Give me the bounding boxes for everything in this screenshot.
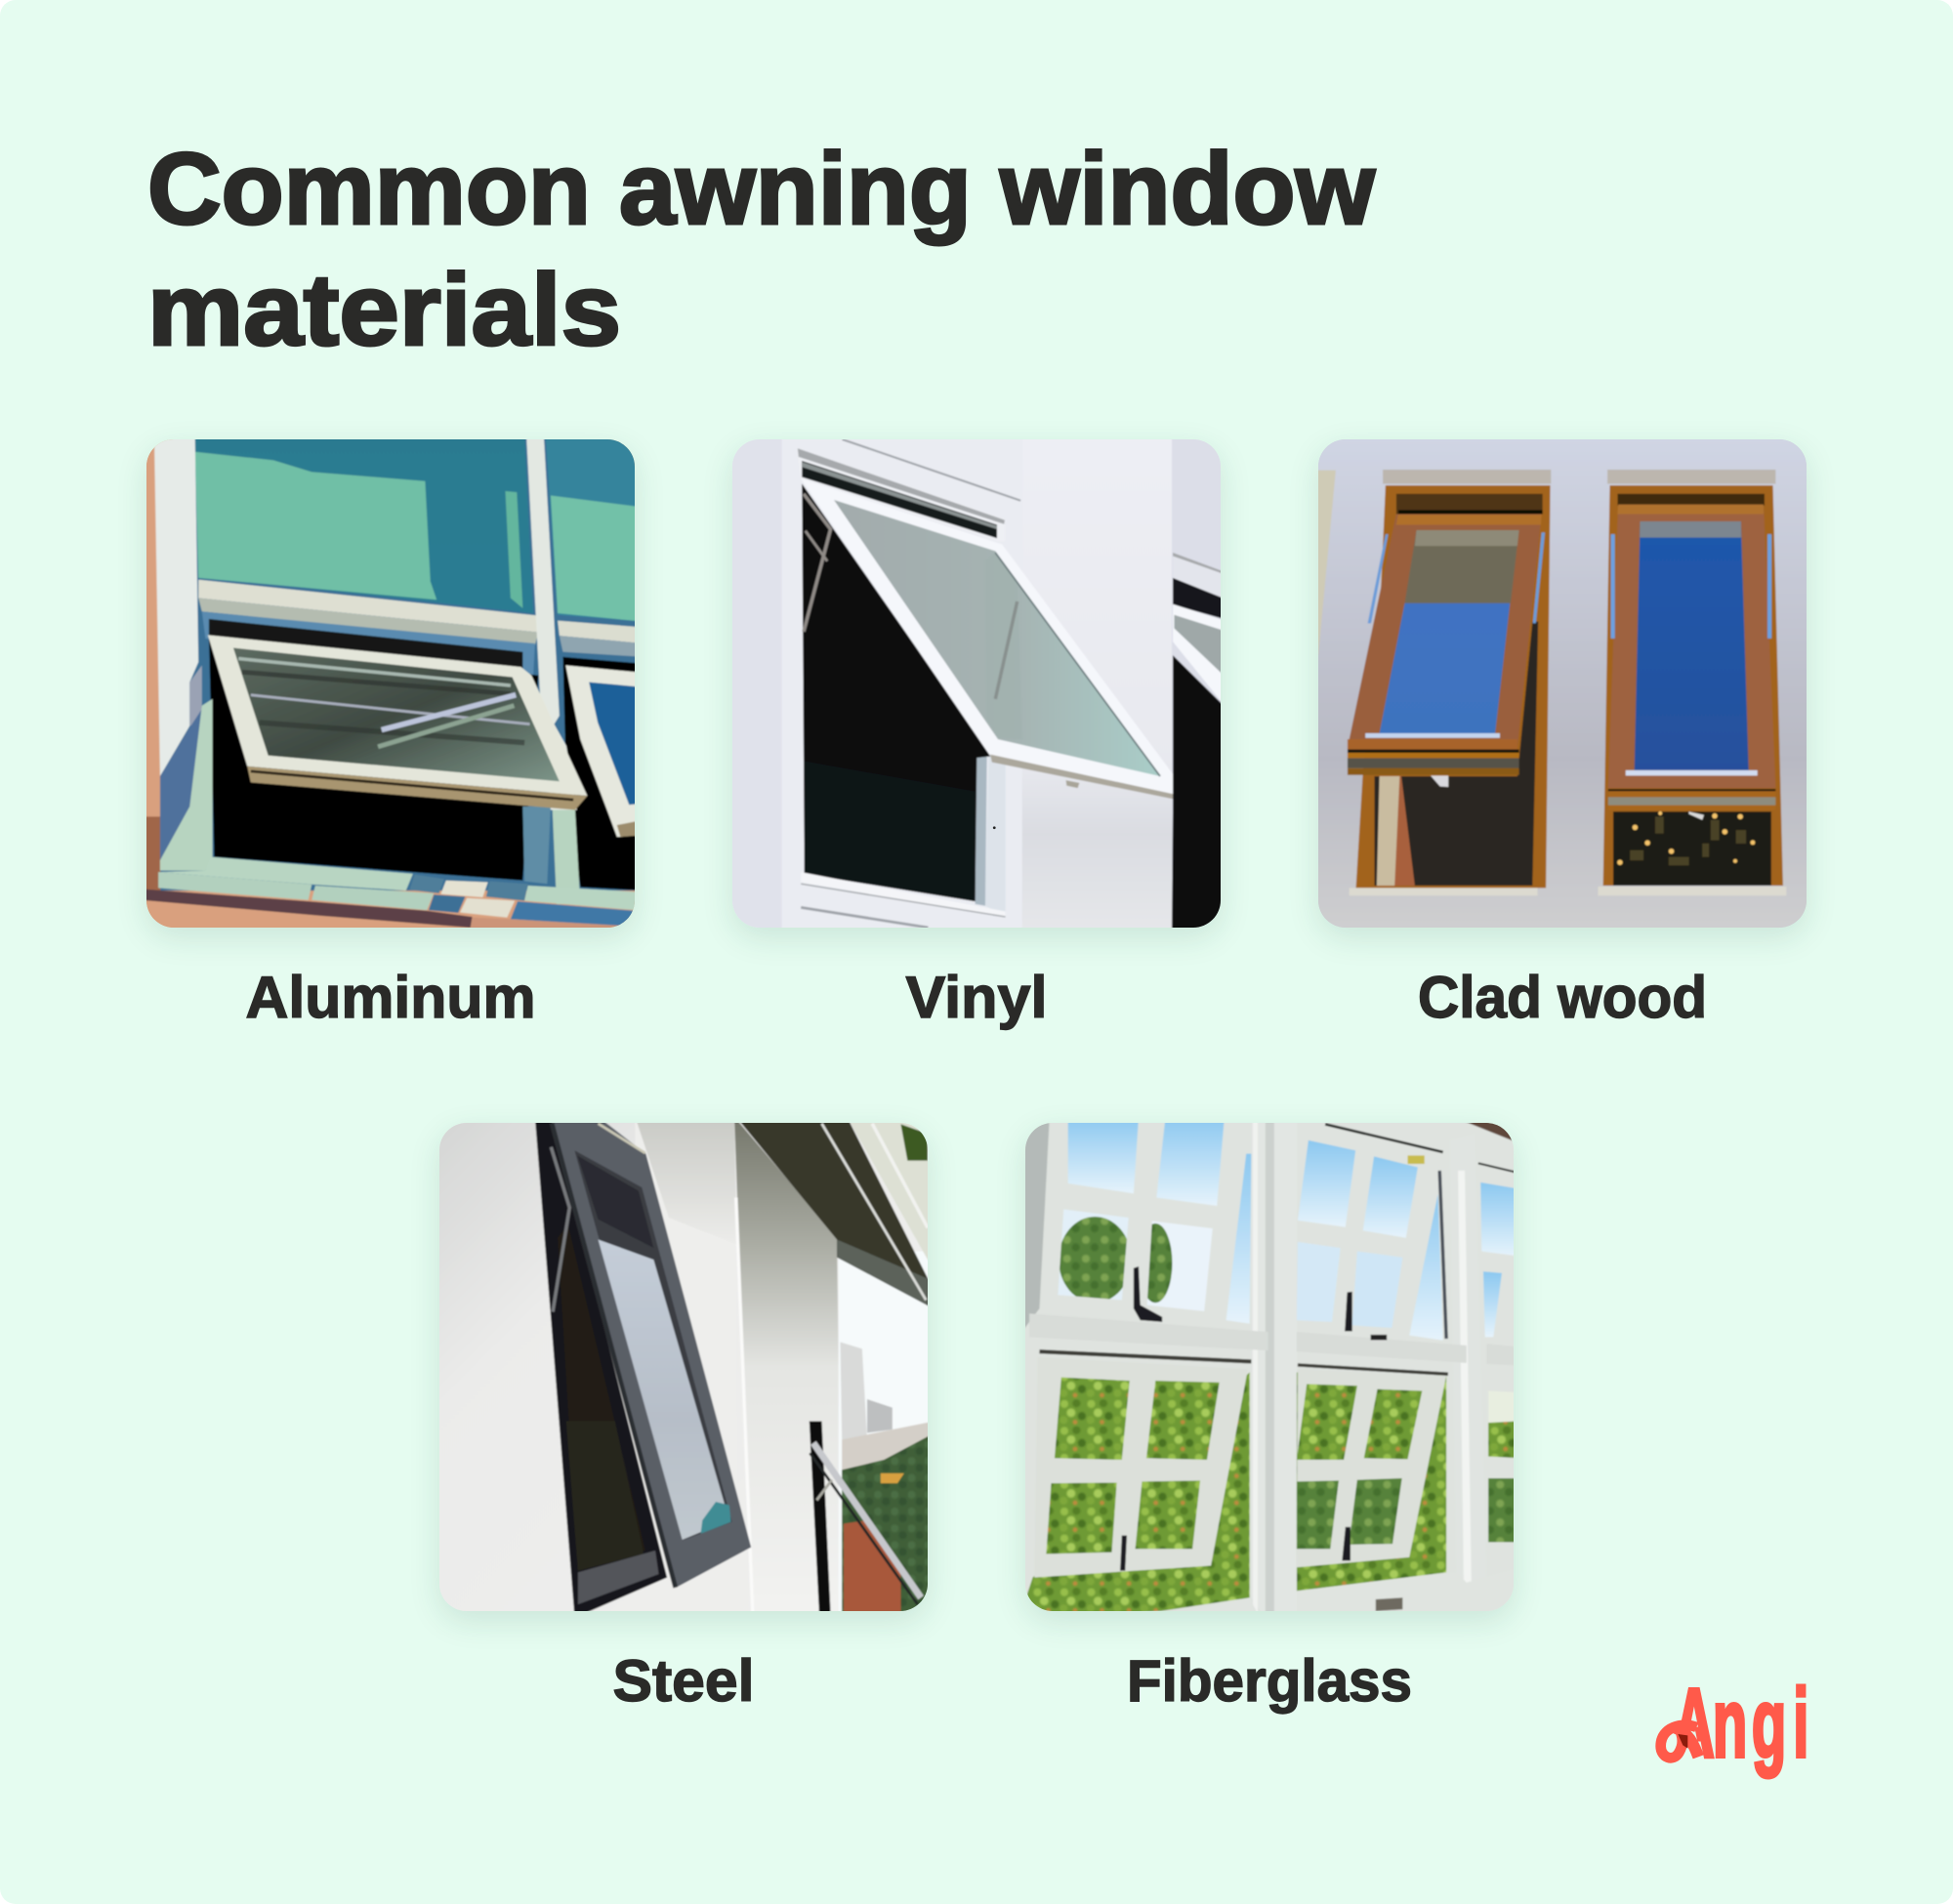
photo: steel awning window xyxy=(439,1123,928,1611)
title: Common awning window xyxy=(147,133,1376,246)
photo: clad wood awning window xyxy=(1318,439,1807,928)
panel: fiberglass xyxy=(1016,1123,1523,1715)
upper sash panes xyxy=(1068,1117,1139,1193)
panel: clad wood xyxy=(1309,439,1816,1030)
label: Aluminum: Aluminum xyxy=(246,965,535,1030)
left window xyxy=(1356,485,1551,888)
lower sash right xyxy=(1297,1369,1446,1567)
label: Vinyl: Vinyl xyxy=(906,965,1047,1030)
title xyxy=(147,133,1377,367)
left sash xyxy=(1348,514,1542,748)
mullions xyxy=(1251,1117,1297,1618)
label: Fiberglass: Fiberglass xyxy=(1127,1648,1412,1714)
right window xyxy=(1603,485,1783,886)
label: Clad wood: Clad wood xyxy=(1418,965,1707,1030)
photo: vinyl awning window xyxy=(732,439,1221,928)
handles xyxy=(1134,1266,1162,1322)
title: materials xyxy=(147,254,621,367)
photo: aluminum awning window xyxy=(146,439,635,928)
panel: steel xyxy=(430,1123,937,1714)
panel: aluminum xyxy=(137,439,644,1030)
photo: fiberglass awning window xyxy=(1025,1123,1514,1611)
icon: logo loop xyxy=(1650,1725,1701,1759)
lower sash left xyxy=(1034,1357,1248,1578)
label: Steel: Steel xyxy=(613,1648,754,1714)
logo: Angi: Angi xyxy=(1674,1670,1808,1778)
panel: vinyl xyxy=(723,439,1230,1031)
